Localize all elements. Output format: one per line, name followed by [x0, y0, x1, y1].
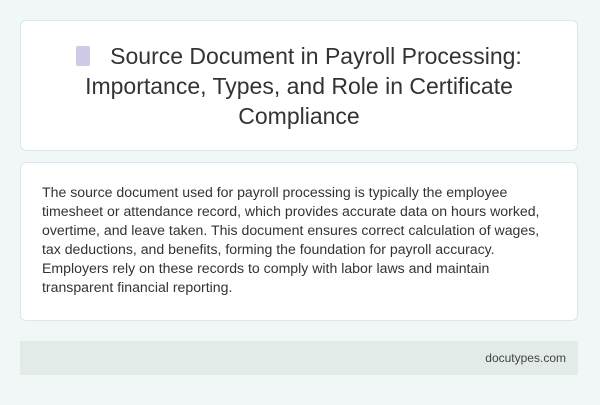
- description card: [20, 162, 578, 321]
- footer: [20, 341, 578, 375]
- title card: [20, 20, 578, 151]
- icon: document: [76, 46, 90, 66]
- description card: The source document used for payroll processing is typically the employee timesheet or attendance record, which provides accurate data on hours worked, overtime, and leave taken. This document ensures correct calculation of wages, tax deductions, and benefits, forming the foundation for payroll accuracy. Employers rely on these records to comply with labor laws and maintain transparent financial reporting.: [42, 184, 539, 295]
- footer: docutypes.com: [485, 351, 566, 365]
- title: Source Document in Payroll Processing: Importance, Types, and Role in Certificate Compliance: [85, 42, 522, 128]
